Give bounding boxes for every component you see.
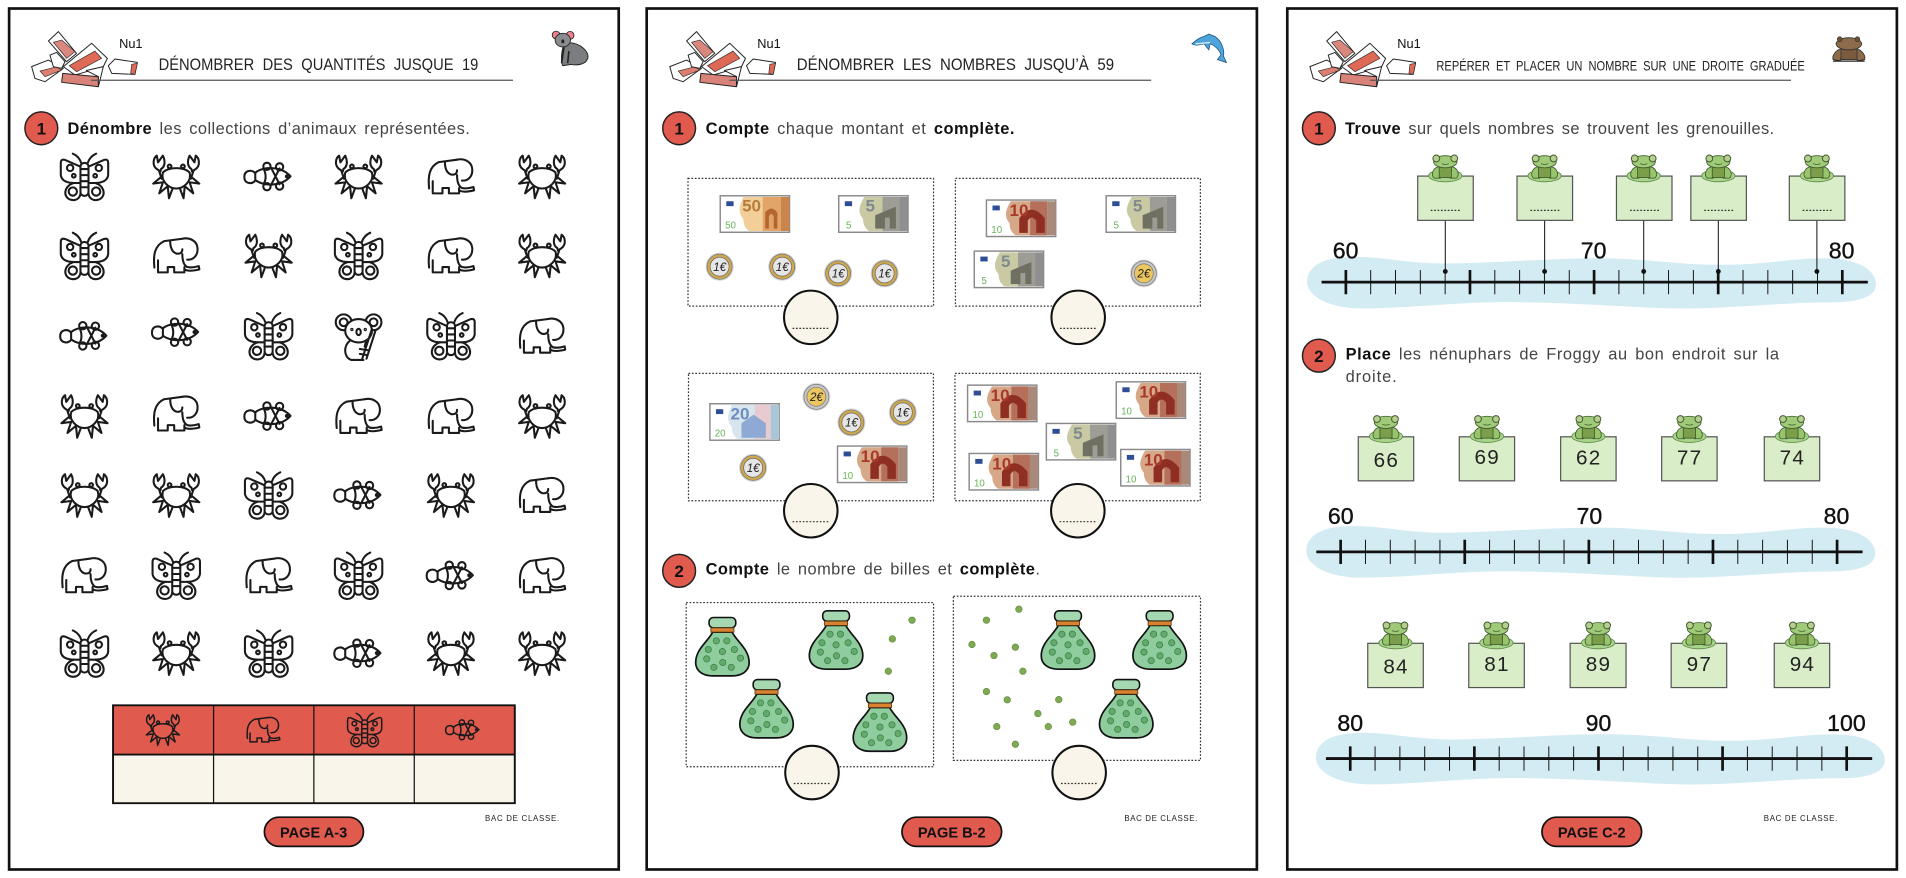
icon: crab [61,474,108,517]
step badge 2: 2 [1314,347,1324,366]
banknote 50 [720,196,790,232]
step badge 2 [1302,339,1335,372]
icon: crab [519,156,565,198]
money box 1 [688,178,934,344]
coin 1 euro [889,398,917,426]
icon: fish [60,322,106,350]
tally table [113,705,515,803]
lily pad card 81: 81 [1484,653,1510,676]
number line 80-100: 80 [1337,710,1363,736]
icon: fish [244,402,291,430]
number line 60-80 with water: 80 [1829,237,1854,263]
lily pad card 74: 74 [1780,447,1805,470]
icon: butterfly [335,233,382,279]
icon: crab [428,474,474,517]
bag of marbles [1099,680,1153,738]
icon: crab [519,632,565,675]
number line 60-80: 70 [1577,503,1602,529]
icon: dolphin [1192,34,1227,63]
answer circle [784,291,838,344]
icon: elephant [520,558,565,592]
icon: butterfly [61,233,108,279]
icon: elephant [246,558,292,592]
banknote 20 [710,404,779,440]
icon: elephant [62,558,108,592]
bag of marbles [1133,611,1186,669]
icon: butterfly [245,630,292,677]
lily pad card 84 [1368,622,1423,688]
banknote 10 [838,446,907,483]
frog answer card 3 [1616,155,1672,274]
title: DÉNOMBRER LES NOMBRES JUSQU’À 59 [797,55,1114,74]
bag of marbles [1041,611,1095,669]
lily pad card 77: 77 [1677,447,1702,470]
lily pad card 81 [1469,622,1524,688]
icon: elephant [520,478,565,512]
bag of marbles [696,618,749,676]
icon: fish [244,163,291,190]
coin 1 euro [871,259,899,287]
icon: elephant [520,319,565,353]
step badge 1: 1 [37,119,46,138]
coin 2 euro [802,383,830,411]
lily pad card 66 [1358,416,1414,481]
page pill [902,817,1002,846]
coin 1 euro [824,259,852,287]
step badge 1 [1302,112,1335,145]
icon: butterfly [348,713,382,747]
banknote 10 [968,385,1037,422]
coin 1 euro [837,408,865,436]
answer circle [785,746,839,799]
marble box 2 [953,596,1200,799]
page pill: PAGE A-3 [280,825,347,841]
number line 80-100 [1316,710,1885,784]
instruction: droite. [1346,368,1397,386]
icon: butterfly [61,630,108,677]
banknote 10 [986,200,1056,237]
coin 1 euro [706,253,734,281]
icon: koala [552,31,588,66]
icon: fish [446,720,479,740]
step badge 2: 2 [674,562,684,581]
lily pad card 62: 62 [1576,447,1601,470]
icon: fish [152,318,198,346]
step badge 2 [663,554,696,587]
page pill [264,817,363,846]
icon: butterfly [335,553,382,599]
number line 80-100: 100 [1827,710,1866,736]
lily pad card 74 [1764,416,1820,481]
lily pad card 94 [1774,622,1830,688]
loose marbles [885,617,915,675]
coin 2 euro [1130,259,1158,287]
credit: BAC DE CLASSE. [1764,814,1837,823]
icon: crab [428,632,474,675]
credit: BAC DE CLASSE. [485,814,559,823]
step badge 1: 1 [1314,119,1324,138]
lily pad card 97: 97 [1687,653,1712,676]
icon: butterfly [61,154,108,200]
money box 3 [688,373,933,538]
step badge 1 [25,112,58,145]
label: Nu1: Nu1 [757,36,781,51]
answer circle [1051,484,1105,538]
icon: crab [61,395,108,438]
instruction: Place les nénuphars de Froggy au bon endroit sur la [1346,345,1780,363]
lily pad card 62 [1561,416,1616,481]
icon: crab [246,235,292,277]
icon: fish [334,481,380,509]
money box 2 [955,178,1200,344]
number line 60-80 [1306,503,1875,578]
icon: butterfly [245,472,292,519]
frog answer card 2 [1517,155,1573,274]
panel: page B-2 [647,9,1257,869]
banknote 10 [1121,449,1190,486]
banknote 5 [1046,423,1116,460]
icon: fish [427,562,473,589]
answer circle [1052,746,1106,799]
icon: crab [519,235,565,277]
banknote 5 [1106,196,1175,232]
frog answer card 4 [1691,155,1746,274]
icon: boxes of chalk logo [670,32,776,87]
icon: boxes of chalk logo [1310,32,1416,87]
instruction: Compte chaque montant et complète. [706,120,1014,138]
lily pad card 77 [1662,416,1717,481]
animal grid [60,154,565,677]
lily pad card 89 [1570,622,1626,688]
lily pad card 89: 89 [1586,653,1611,676]
icon: crab [153,474,199,517]
icon: butterfly [153,553,200,599]
icon: butterfly [427,313,475,359]
step badge 1: 1 [674,119,684,138]
panel: page C-2 [1287,9,1897,869]
icon: elephant [154,238,199,272]
lily pad card 94: 94 [1790,653,1815,676]
page pill: PAGE C-2 [1558,825,1626,841]
label: Nu1: Nu1 [1397,36,1421,51]
loose marbles [969,606,1076,748]
number line 80-100: 90 [1586,710,1611,736]
banknote 10 [969,453,1038,490]
icon: butterfly [245,313,292,359]
coin 1 euro [739,454,767,482]
icon: boxes of chalk logo [32,32,137,87]
icon: elephant [247,717,280,742]
lily pad card 69: 69 [1475,446,1500,469]
frog answer card 5 [1789,155,1845,274]
number line 60-80 with water: 60 [1333,237,1358,263]
icon: elephant [429,399,474,433]
icon: crab [519,395,565,438]
number line 60-80 with water [1307,237,1876,309]
bag of marbles [740,680,793,738]
credit: BAC DE CLASSE. [1124,814,1197,823]
step badge 1 [663,112,696,145]
money box 4 [955,373,1200,538]
panel: page A-3 [9,9,619,869]
answer circle [784,484,838,538]
instruction: Dénombre les collections d’animaux représentées. [67,120,470,138]
title: DÉNOMBRER DES QUANTITÉS JUSQUE 19 [159,55,478,74]
lily pad card 66: 66 [1374,449,1399,472]
icon: crab [153,632,199,675]
banknote 5 [974,251,1044,288]
icon: elephant [429,238,474,272]
number line 60-80: 80 [1824,503,1849,529]
icon: elephant [154,396,199,430]
number line 60-80: 60 [1328,503,1354,529]
instruction [1346,345,1780,386]
lily pad card 69 [1459,416,1515,481]
icon: toad [1833,37,1865,61]
instruction: Trouve sur quels nombres se trouvent les grenouilles. [1345,120,1774,138]
lily pad card 84: 84 [1383,656,1409,679]
number line 60-80 with water: 70 [1581,237,1606,263]
bag of marbles [809,611,863,669]
icon: fish [334,639,380,667]
banknote 5 [839,196,908,232]
icon: koala [336,314,381,360]
frog answer card 1 [1418,155,1473,274]
coin 1 euro [768,253,796,281]
icon: crab [335,156,382,198]
icon: elephant [336,399,382,433]
label: Nu1: Nu1 [119,36,143,51]
icon: elephant [429,159,474,193]
bag of marbles [853,693,907,751]
page pill: PAGE B-2 [918,825,986,841]
title: REPÉRER ET PLACER UN NOMBRE SUR UNE DROITE GRADUÉE [1436,58,1805,74]
lily pad card 97 [1671,622,1727,688]
icon: crab [146,715,180,745]
page pill [1542,817,1642,846]
icon: crab [153,156,199,198]
marble box 1 [686,603,934,799]
answer circle [1051,291,1105,344]
instruction: Compte le nombre de billes et complète. [706,561,1040,579]
banknote 10 [1116,382,1186,418]
